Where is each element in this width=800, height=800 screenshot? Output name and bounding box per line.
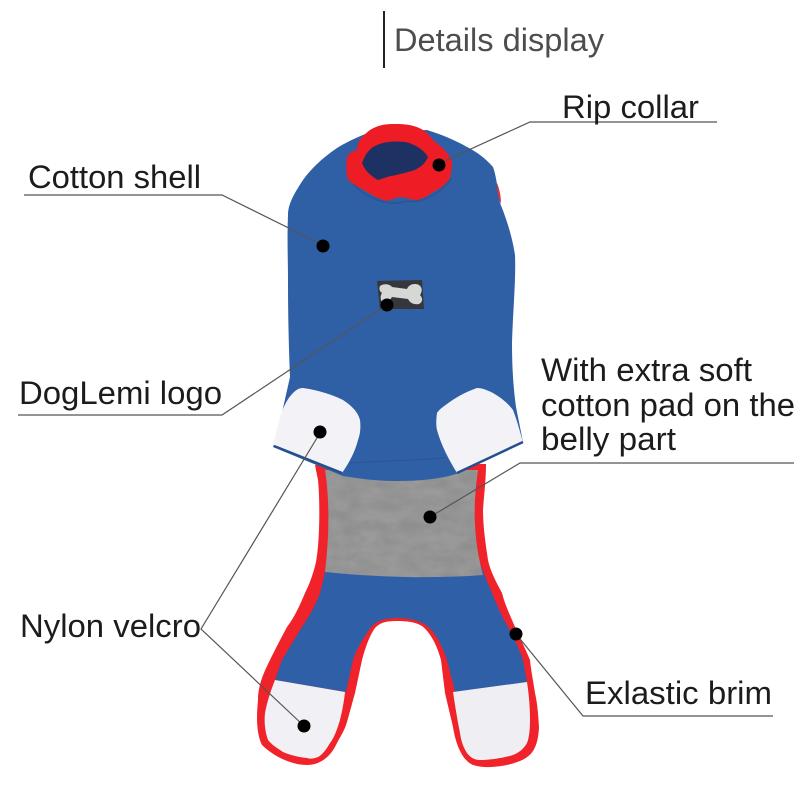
left chest velcro bbox=[273, 388, 360, 473]
callout: With extra soft cotton pad on the belly part bbox=[424, 352, 795, 524]
collar inner opening bbox=[362, 141, 428, 180]
collar seam shadow bbox=[347, 170, 452, 203]
hem stitch bbox=[350, 458, 445, 463]
callout: Nylon velcro bbox=[20, 426, 326, 732]
right foot velcro bbox=[453, 682, 530, 760]
callout: With extra soft cotton pad on the belly part: belly part bbox=[541, 421, 676, 457]
callout: Nylon velcro: Nylon velcro bbox=[20, 608, 201, 644]
callout: DogLemi logo: DogLemi logo bbox=[19, 375, 222, 411]
left foot velcro bbox=[265, 680, 345, 759]
red side patch bbox=[497, 183, 501, 204]
callout: With extra soft cotton pad on the belly part: With extra soft bbox=[541, 352, 752, 388]
callout: Cotton shell bbox=[24, 159, 330, 252]
callout: Rip collar bbox=[432, 89, 717, 172]
callout: Rip collar: Rip collar bbox=[562, 89, 699, 125]
blue lower panel bbox=[275, 565, 527, 692]
bone logo patch bbox=[377, 280, 424, 309]
right chest velcro bbox=[436, 388, 523, 473]
callout: Exlastic brim: Exlastic brim bbox=[585, 675, 772, 711]
garment: upper body cotton shell bbox=[273, 124, 523, 481]
grey belly cotton pad bbox=[325, 470, 483, 578]
callout: Exlastic brim bbox=[510, 628, 773, 716]
callout: With extra soft cotton pad on the belly part: cotton pad on the bbox=[541, 387, 795, 423]
red elastic brim bbox=[257, 464, 539, 767]
header: Details display: Details display bbox=[394, 22, 604, 58]
callout: DogLemi logo bbox=[18, 298, 394, 415]
garment: dog recovery suit lower part bbox=[257, 464, 539, 767]
callout: Cotton shell: Cotton shell bbox=[28, 159, 201, 195]
red rib collar bbox=[346, 124, 452, 201]
